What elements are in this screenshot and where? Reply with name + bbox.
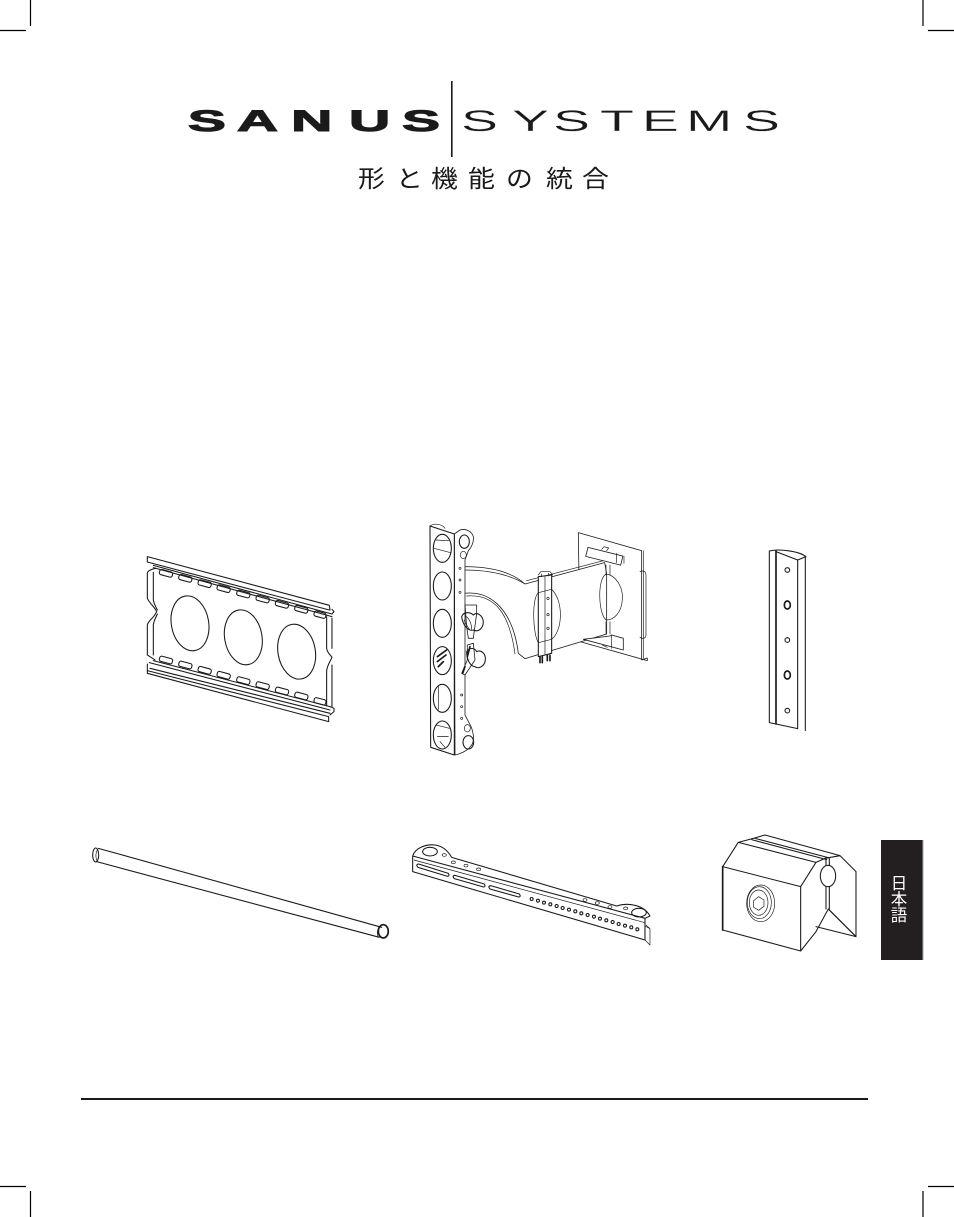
- illustration: slotted bar: [413, 845, 650, 945]
- arm: wall column: [430, 524, 474, 755]
- logo: Sanus Systems: [188, 81, 780, 157]
- language tab: [881, 840, 924, 960]
- illustration: clamp block: [723, 835, 856, 951]
- illustration: adapter strip: [769, 550, 806, 731]
- logo wordmark: SYSTEMS: SYSTEMS: [461, 105, 780, 138]
- language tab label: 語: [891, 907, 907, 925]
- arm: upper knob: [462, 605, 483, 638]
- language tab label: 日: [891, 875, 907, 893]
- footer rule: [81, 1098, 868, 1100]
- language tab label: 本: [891, 890, 908, 909]
- illustration: wall plate: [147, 557, 334, 722]
- logo wordmark: SANUS: SANUS: [188, 104, 440, 138]
- tagline: 形と機能の統合: [358, 166, 609, 193]
- arm: curved arm: [464, 563, 607, 659]
- logo divider: [451, 81, 453, 157]
- illustration: support rod: [93, 848, 388, 938]
- arm: lower knob: [462, 643, 485, 675]
- arm: back plate: [578, 533, 647, 661]
- arm: hinge: [534, 572, 560, 663]
- arm: lower bracket: [583, 635, 623, 650]
- illustration: articulating arm: [430, 524, 647, 755]
